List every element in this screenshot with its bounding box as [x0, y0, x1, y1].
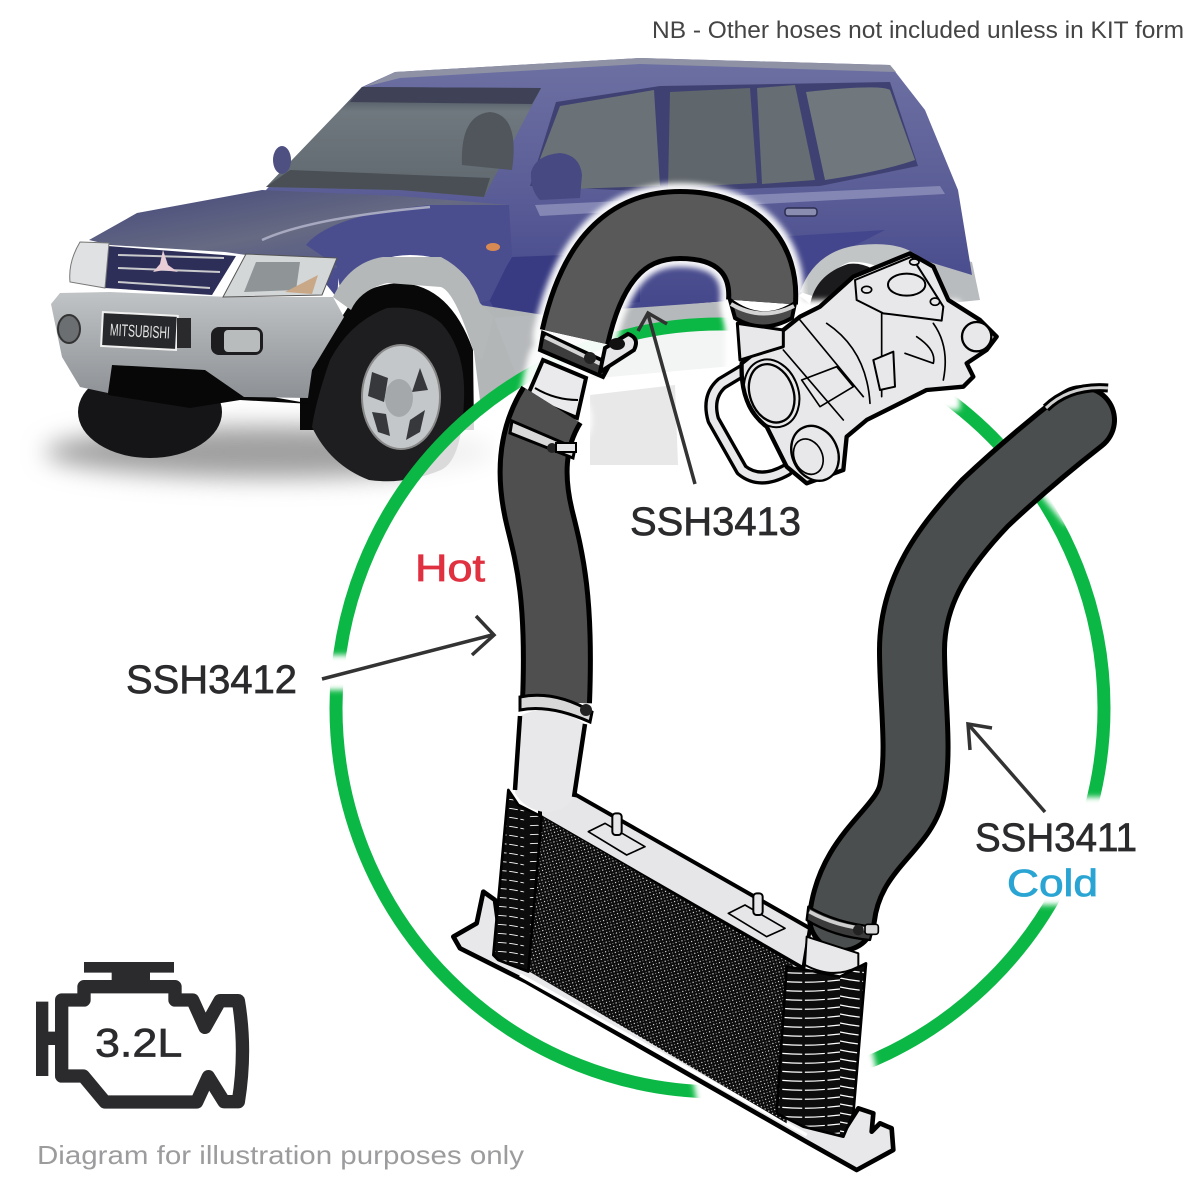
hose SSH3412 hot side — [510, 405, 576, 702]
top plate — [540, 792, 810, 968]
right boss — [962, 322, 991, 351]
ring gap bottom — [692, 1040, 880, 1120]
hood — [89, 190, 512, 268]
lower round cap — [782, 418, 848, 489]
base mounting plate — [453, 892, 893, 1170]
right fin stack — [777, 963, 866, 1137]
body belt highlight — [535, 186, 945, 216]
ring gap at SSH3412 label — [315, 655, 360, 690]
mounting stud left — [588, 813, 645, 855]
engine outline — [62, 987, 242, 1102]
wheel arch dark — [300, 283, 474, 430]
green ring — [315, 300, 1120, 1120]
ring gap top — [725, 300, 960, 410]
roof and body shell — [260, 58, 972, 320]
upper hose clamp right — [730, 300, 795, 326]
wing mirror right — [531, 153, 582, 200]
windshield — [266, 87, 541, 197]
number plate — [101, 312, 178, 350]
label Hot: Hot — [415, 548, 486, 590]
third side window — [757, 85, 815, 184]
rear tail and bumper — [925, 250, 980, 305]
oil cooler intercooler — [453, 790, 893, 1170]
lower inner cap — [788, 434, 829, 479]
front door window — [535, 90, 660, 190]
number plate: MITSUBISHI — [109, 320, 170, 343]
alloy wheel — [362, 345, 440, 449]
metal pipe between hot hoses — [527, 360, 586, 418]
front tire — [312, 308, 464, 481]
inlet outer ring — [735, 352, 809, 435]
under bumper black — [108, 362, 312, 408]
grille lower vents — [177, 318, 191, 348]
mounting bracket — [600, 334, 636, 372]
label SSH3411: SSH3411 — [975, 816, 1137, 860]
EGR valve line drawing — [711, 253, 997, 489]
grille slats — [118, 255, 224, 288]
windshield top shade — [350, 87, 541, 104]
label Cold: Cold — [1007, 863, 1098, 905]
inlet ring — [741, 358, 802, 429]
hose SSH3413 upper bend — [540, 225, 795, 377]
rear silver arch — [800, 244, 935, 300]
hose SSH3411 cold side — [842, 388, 1108, 918]
fin core — [527, 815, 793, 1123]
silver fender arch — [333, 257, 494, 360]
note top right: NB - Other hoses not included unless in KIT form — [652, 17, 1184, 44]
wing mirror left — [273, 146, 291, 174]
flange plate — [855, 257, 943, 321]
engine size: 3.2L — [95, 1022, 182, 1066]
window frame — [530, 82, 918, 192]
lower door panel — [488, 252, 640, 318]
rear silver cladding — [474, 305, 550, 400]
cold hose top clamp — [1046, 388, 1108, 408]
three diamond emblem — [153, 250, 178, 272]
base white strip — [520, 975, 807, 1135]
silver rocker sill — [494, 296, 830, 385]
label SSH3412: SSH3412 — [126, 658, 297, 702]
ring gap at SSH3411 label — [1030, 797, 1120, 905]
hot hose clamp bottom — [520, 695, 592, 722]
mounting stud right — [728, 893, 785, 937]
arrow to SSH3412 — [322, 616, 494, 679]
rear side window — [806, 87, 915, 180]
metal pipe to intercooler — [515, 710, 585, 812]
turn indicator — [486, 243, 500, 251]
left tire — [78, 366, 222, 458]
dashboard strip — [266, 170, 490, 197]
hose halo — [534, 225, 762, 520]
engine top cap — [84, 962, 174, 983]
grille — [105, 246, 236, 295]
actuator clip — [873, 352, 895, 390]
body contour lines — [783, 313, 945, 420]
left headlight — [70, 242, 109, 288]
fog lamp right — [211, 327, 263, 355]
icon: engine 3.2L — [36, 962, 242, 1102]
label SSH3413: SSH3413 — [630, 500, 801, 544]
fog lamp left — [58, 315, 80, 343]
door handle — [785, 208, 817, 216]
fender blue — [306, 205, 512, 303]
wheel spokes — [368, 368, 428, 440]
arrow to SSH3411 — [968, 724, 1045, 812]
second side window — [668, 88, 757, 188]
cold hose bottom clamp — [807, 907, 878, 940]
ring gap upper right — [1000, 420, 1100, 525]
engine left plug — [36, 1002, 57, 1076]
fade within ring — [336, 324, 1104, 1092]
right headlight — [223, 254, 337, 297]
arrow to SSH3413 — [638, 313, 695, 484]
pipe socket right — [805, 937, 858, 973]
bumper — [51, 292, 344, 398]
roof rail — [362, 58, 896, 88]
left fin stack — [493, 790, 542, 972]
hose loop tube — [711, 368, 787, 477]
disclaimer: Diagram for illustration purposes only — [37, 1140, 524, 1170]
hot hose clamp top — [510, 421, 576, 458]
valve outer body — [742, 253, 997, 483]
hood crease — [262, 207, 430, 240]
car photo illustration — [45, 58, 1104, 1092]
rear wheel ghost — [590, 385, 678, 465]
outlet pipe stub — [737, 323, 783, 360]
upper hose clamp left — [540, 333, 610, 377]
wheel hub — [385, 379, 413, 417]
ground shadow — [45, 426, 495, 478]
seat silhouette — [462, 112, 514, 170]
